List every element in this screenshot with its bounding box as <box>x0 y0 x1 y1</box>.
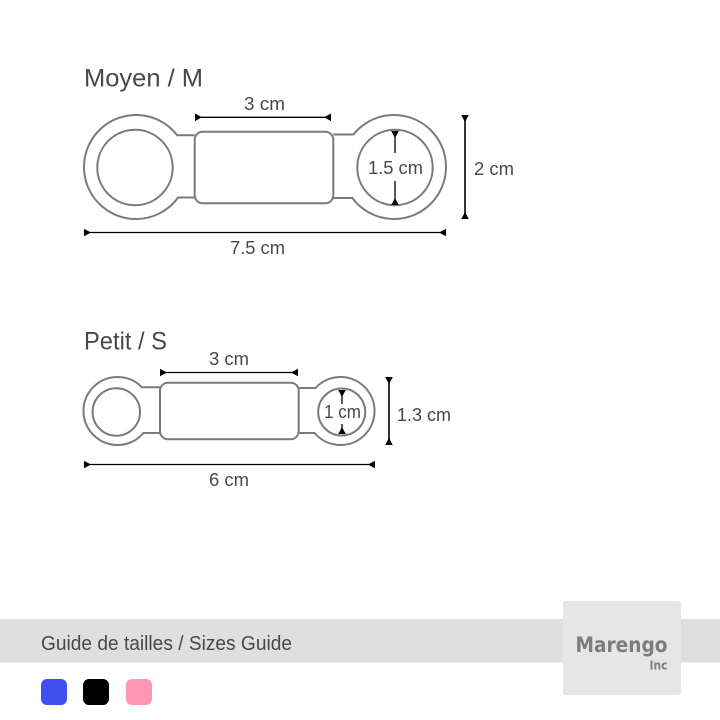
logo: Marengo Inc <box>563 601 681 695</box>
swatch: blue <box>41 679 67 705</box>
medium height arrow: 2 cm: 2 cm <box>474 159 514 179</box>
footer band <box>0 619 720 662</box>
small product outline <box>83 377 375 445</box>
small height arrow: 1.3 cm: 1.3 cm <box>397 405 451 425</box>
medium hole diameter arrow: 1.5 cm: 1.5 cm <box>368 158 423 178</box>
medium hole diameter arrow: 1.5 cm <box>368 131 423 205</box>
medium width arrow: 3 cm: 3 cm <box>244 94 285 114</box>
colour swatches <box>41 679 152 705</box>
medium width arrow: 3 cm <box>195 94 331 121</box>
small total length arrow: 6 cm <box>84 461 375 490</box>
medium total length arrow: 7.5 cm <box>84 229 446 258</box>
heading: Moyen / M: Moyen / M <box>84 64 203 92</box>
panel: small size diagram <box>83 349 451 490</box>
medium product outline <box>84 115 446 219</box>
small height arrow: 1.3 cm <box>385 377 451 445</box>
medium total length arrow: 7.5 cm: 7.5 cm <box>230 238 285 258</box>
panel: medium size diagram <box>84 94 514 258</box>
medium height arrow: 2 cm <box>461 115 514 219</box>
small hole diameter arrow: 1 cm <box>324 390 361 434</box>
small hole diameter arrow: 1 cm: 1 cm <box>324 402 361 422</box>
small width arrow: 3 cm: 3 cm <box>209 349 249 369</box>
heading: Petit / S: Petit / S <box>84 328 167 356</box>
logo: Marengo Inc: Inc <box>650 658 668 672</box>
swatch: pink <box>126 679 152 705</box>
swatch: black <box>83 679 109 705</box>
logo: Marengo Inc: Marengo <box>576 633 668 657</box>
small total length arrow: 6 cm: 6 cm <box>209 470 249 490</box>
footer title: Guide de tailles / Sizes Guide <box>41 633 292 655</box>
small width arrow: 3 cm <box>160 349 298 376</box>
